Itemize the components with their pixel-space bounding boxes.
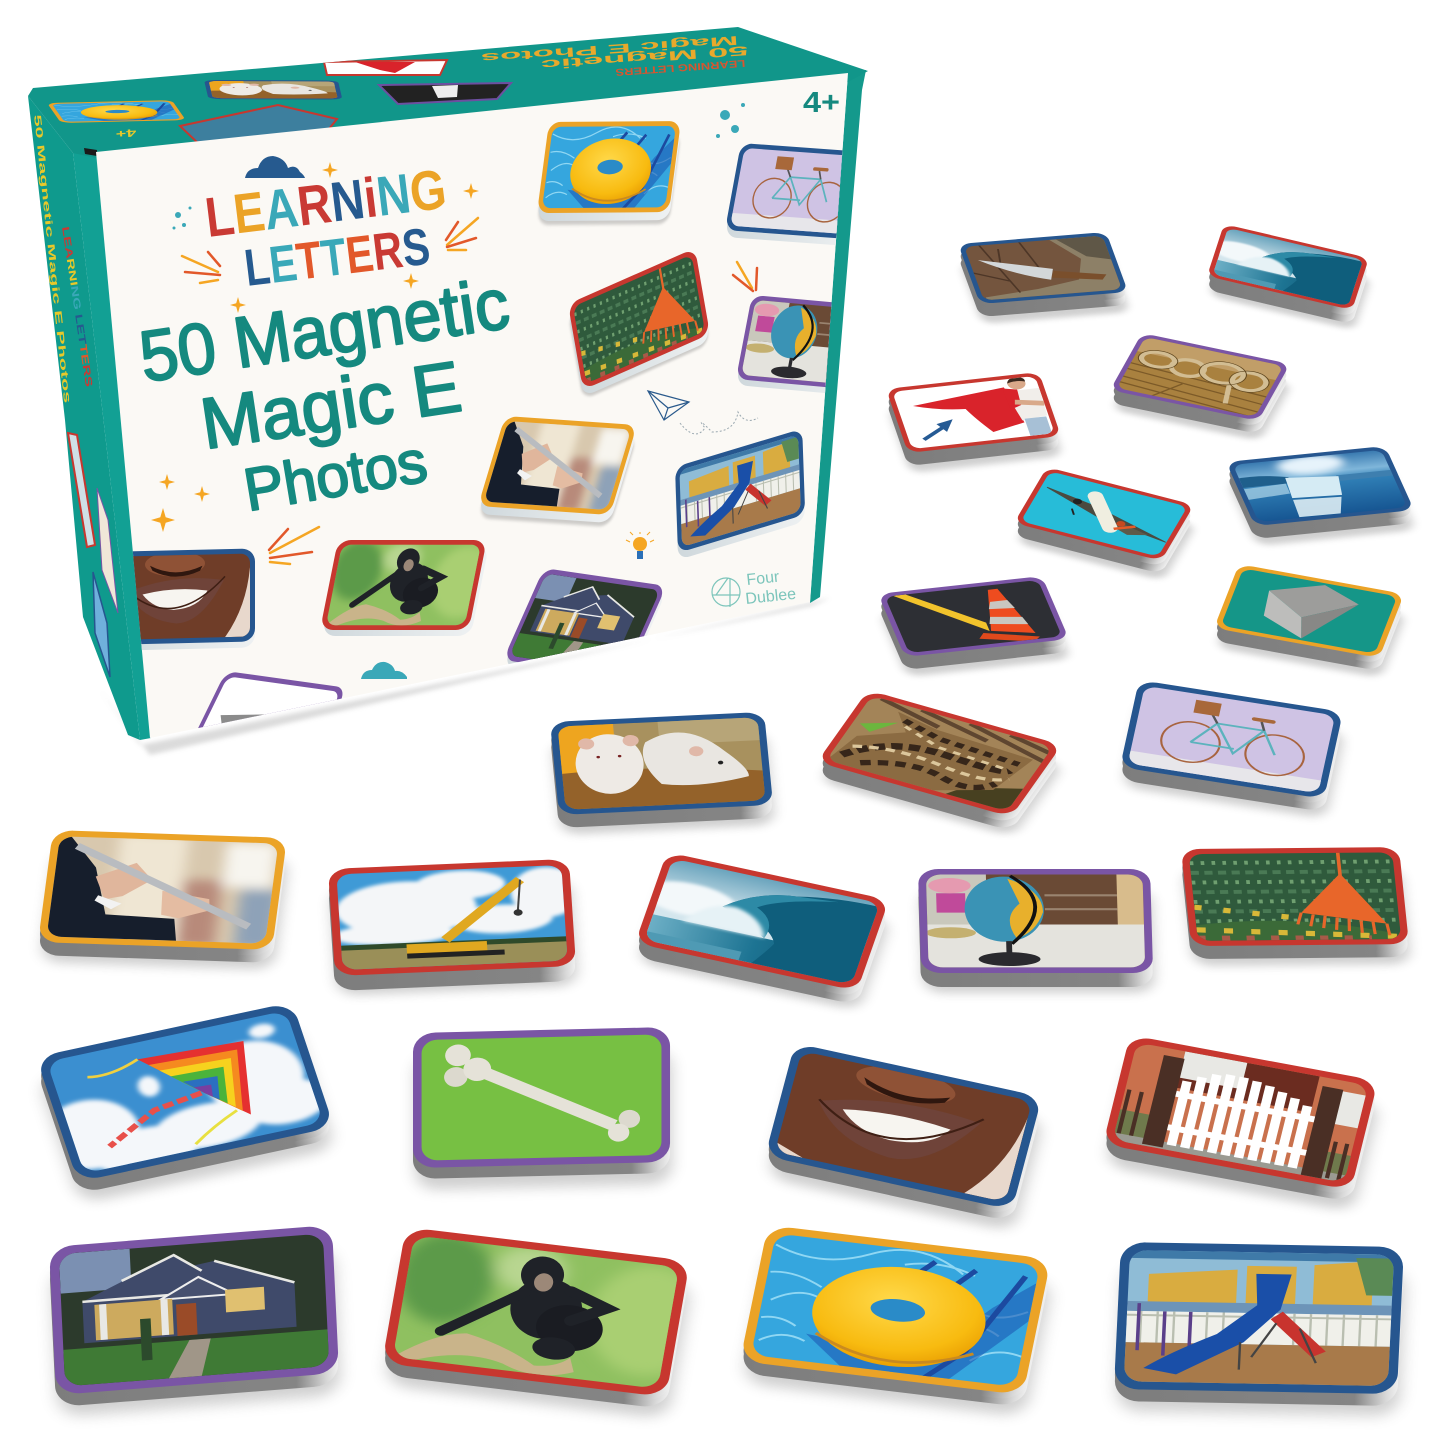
burst right of logo: [446, 218, 478, 250]
lightbulb: [626, 532, 654, 559]
face card: bike: [727, 144, 842, 245]
dotted trail: [680, 412, 758, 434]
flap card: wave: [180, 105, 337, 145]
flap text: 50 Magnetic: 50 Magnetic: [540, 43, 749, 72]
title: Magic E: Magic E: [196, 347, 466, 465]
box: [28, 27, 884, 778]
face card: ring: [537, 121, 681, 225]
burst above chimp card: [269, 527, 319, 564]
logo: LETTERS: LETTERS: [241, 218, 433, 298]
face card: playground: [675, 429, 805, 560]
box face photos: [105, 121, 884, 778]
logo cloud: [245, 156, 305, 178]
flap text: Magic E Photos: Magic E Photos: [480, 33, 739, 66]
loose card: rats: [550, 712, 775, 835]
side text: magnetic photos: 50 Magnetic Magic E Photos: [31, 114, 73, 404]
loose card: playground: [1114, 1242, 1406, 1416]
loose card: chimp: [382, 1227, 719, 1419]
side text: learning letters: LEARNING LETTERS: [59, 226, 94, 388]
loose card: smile: [765, 1043, 1044, 1232]
box side panel: [28, 96, 140, 740]
age label: 4+: [803, 87, 840, 119]
loose card: knife: [958, 232, 1130, 324]
loose card: block: [1214, 564, 1406, 678]
flap card: cape: [324, 60, 447, 75]
loose card: cone: [878, 576, 1071, 677]
face card: stove: [198, 672, 342, 728]
loose card: bike: [1120, 680, 1345, 819]
loose card: flute: [38, 830, 289, 970]
loose card: rake: [1181, 847, 1411, 966]
Four Dublee logo: [712, 569, 797, 608]
loose card: globe: [918, 869, 1155, 993]
side card: red: [68, 433, 95, 547]
top flap pictures: [47, 33, 749, 145]
face card: flute: [478, 416, 637, 527]
loose card: plane: [1014, 467, 1196, 581]
logo: LEARNING: LEARNiNG: [202, 157, 450, 249]
Four Dublee logo: Dublee: [745, 586, 797, 608]
box top flap: [28, 27, 868, 158]
stars: [151, 162, 479, 532]
flap age: 4+: [115, 126, 137, 139]
loose card: kite: [15, 1001, 341, 1204]
face card: house: [507, 570, 662, 664]
box opening notch: [84, 148, 97, 156]
loose card: fence: [1103, 1035, 1380, 1212]
loose card: crane: [328, 858, 586, 996]
loose card: snake: [817, 690, 1064, 837]
lower cloud: [361, 662, 407, 679]
title: Photos: Photos: [239, 427, 432, 524]
loose card: house: [49, 1225, 341, 1417]
burst left of logo: [182, 252, 220, 283]
loose card: ring: [740, 1225, 1053, 1417]
face card: globe: [738, 296, 832, 393]
box front face: [96, 73, 848, 738]
side text: [31, 114, 118, 677]
flap phone glyph: [432, 85, 458, 98]
face card: rake: [568, 248, 710, 400]
title: 50 Magnetic: 50 Magnetic: [135, 264, 514, 398]
side card: blue: [93, 572, 110, 677]
flap card: rats: [204, 80, 342, 100]
loose card: wave large: [626, 850, 891, 1011]
loose card: rope: [1110, 333, 1292, 441]
logo dots: [172, 206, 192, 230]
loose card: wave small: [1201, 223, 1371, 330]
box ground shadow: [100, 598, 830, 755]
box front left strip: [73, 152, 151, 740]
loose card: ice: [1226, 446, 1416, 546]
burst near rake: [733, 262, 757, 291]
loose card: cape: [886, 372, 1063, 473]
flap text: learning letters: LEARNING LETTERS: [615, 57, 746, 77]
paper plane: [648, 391, 689, 420]
flap cape figure: [355, 62, 415, 73]
loose card: bone: [413, 1027, 672, 1190]
face card: smile: [132, 548, 255, 650]
side card: white: [97, 488, 118, 613]
face card: chimp: [320, 540, 502, 636]
flap card: phone: [379, 83, 511, 104]
dots top right: [716, 103, 745, 138]
flap card: ring: [47, 100, 186, 123]
Four Dublee logo: Four: [746, 569, 781, 589]
box right strip: [810, 70, 866, 603]
